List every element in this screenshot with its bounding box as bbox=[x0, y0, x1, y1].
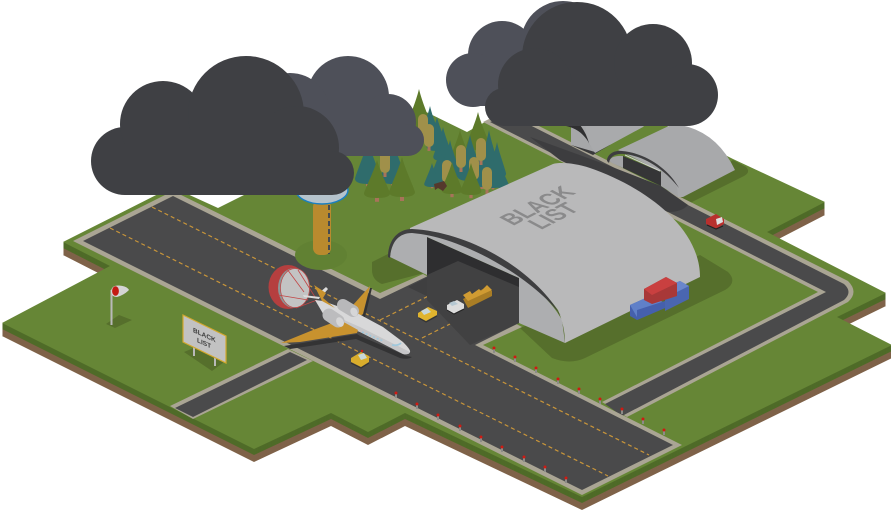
hangar two bbox=[607, 124, 735, 197]
hangar roof bbox=[410, 163, 700, 343]
hangar two doorway bbox=[623, 156, 661, 186]
runway lights bbox=[394, 346, 666, 483]
side road bbox=[170, 349, 313, 419]
hangar three bbox=[566, 110, 660, 155]
hangar two wall right bbox=[661, 170, 678, 197]
bear bbox=[434, 181, 447, 191]
hangar roof lettering: LIST bbox=[521, 199, 585, 233]
follow-me car bbox=[351, 350, 369, 368]
sign text: LIST bbox=[197, 337, 212, 351]
upper wing bbox=[353, 286, 370, 318]
hangar front arch bbox=[388, 229, 561, 316]
lower wing bbox=[281, 320, 358, 343]
hangar two wall left bbox=[609, 156, 623, 168]
stabilizers bbox=[303, 287, 328, 299]
front left cloud bbox=[91, 56, 354, 195]
airplane bbox=[268, 265, 412, 359]
cabin windows bbox=[362, 332, 383, 341]
front right cloud bbox=[485, 2, 718, 126]
tail fin bbox=[314, 285, 335, 308]
hangar two arch bbox=[607, 151, 679, 188]
back left cloud bbox=[250, 56, 424, 156]
runway and apron bbox=[73, 191, 682, 495]
parachute bbox=[268, 265, 317, 309]
ground shadows of hangars bbox=[372, 160, 748, 362]
hangar roof lettering: BLACK bbox=[493, 182, 582, 229]
baggage train and tug bbox=[447, 285, 492, 314]
fuselage bbox=[315, 300, 410, 354]
back right cloud bbox=[446, 1, 605, 107]
plane shadow bbox=[284, 334, 412, 359]
engines bbox=[343, 305, 353, 311]
shipping containers bbox=[630, 277, 689, 320]
yellow cart bbox=[418, 307, 437, 322]
control tower bbox=[295, 176, 348, 270]
red truck bbox=[706, 214, 724, 229]
runway dashed lines bbox=[110, 207, 649, 476]
hangar floor bbox=[427, 261, 519, 345]
forest bbox=[355, 89, 509, 202]
hangar door bbox=[427, 237, 519, 323]
airfield sign bbox=[183, 315, 226, 371]
windsock bbox=[106, 285, 132, 328]
hangar walls bbox=[390, 231, 565, 343]
sign text: BLACK bbox=[193, 327, 216, 344]
hangar two roof bbox=[618, 124, 735, 197]
far road bbox=[483, 110, 854, 417]
main hangar bbox=[388, 163, 700, 345]
